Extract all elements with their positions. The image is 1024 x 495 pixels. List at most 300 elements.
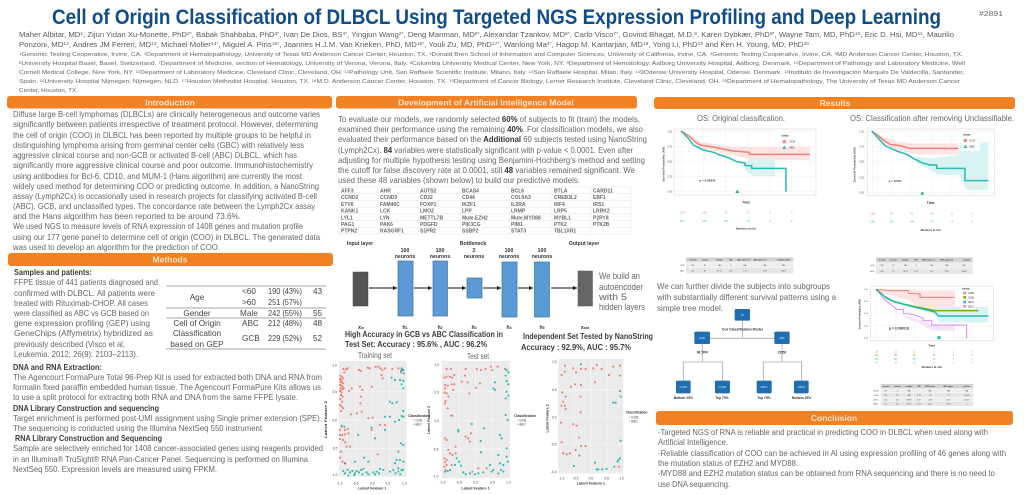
survival chart: after removing unclassifiable: Survival Probability (KM) bbox=[853, 147, 857, 182]
survival chart: after removing unclassifiable: 91 bbox=[890, 211, 894, 215]
chart title: original classification: OS: Original classification. bbox=[697, 114, 785, 123]
hazard table: original classification: 95% lower CI bbox=[737, 258, 750, 261]
gene table: ETV6 bbox=[341, 202, 354, 208]
abstract number: #2891 bbox=[979, 9, 1003, 18]
survival chart: four subgroups: 1.00 bbox=[864, 289, 869, 291]
autoencoder network diagram: neurons bbox=[464, 254, 484, 260]
scatter plot: test set: 0.5 bbox=[490, 481, 495, 485]
survival chart: after removing unclassifiable: GCB bbox=[969, 139, 975, 143]
hazard table: four subgroups: 42 bbox=[885, 404, 887, 406]
patient characteristics table: 55 bbox=[313, 309, 323, 318]
survival chart: after removing unclassifiable: 17 bbox=[930, 220, 934, 224]
hazard table: four subgroups: 95% lower bbox=[925, 385, 935, 388]
conclusion text: the mutation status of EZH2 and MYD88. bbox=[658, 459, 798, 468]
scatter plot: training set: 1.0 bbox=[402, 481, 407, 485]
survival chart: original classification: 1.00 bbox=[667, 132, 673, 134]
scatter plot: test set: Latent Feature 2 bbox=[427, 406, 431, 434]
classification tree diagram: Our Classification Model bbox=[722, 327, 763, 331]
classification tree diagram: ABC1 bbox=[760, 385, 768, 389]
survival chart: four subgroups: 0 bbox=[953, 362, 955, 364]
model description text: the cutoff for false discovery rate at 0.0001, still 48 variables remained significant. We bbox=[338, 166, 635, 175]
hazard table: four subgroups: 3.16 bbox=[917, 395, 922, 397]
classification tree diagram: Bottom 25% bbox=[792, 396, 811, 400]
autoencoder network diagram: h3 bbox=[471, 325, 477, 331]
autoencoder note bbox=[598, 270, 645, 312]
scatter plot: training set: 0.0 bbox=[370, 481, 375, 485]
survival chart: after removing unclassifiable: 135 bbox=[870, 220, 875, 224]
gene table: KANK1 bbox=[341, 209, 358, 215]
survival chart: four subgroups: 4 bbox=[953, 355, 955, 357]
scatter plot: test set: -0.5 bbox=[433, 447, 439, 451]
classification tree diagram: GCB bbox=[699, 336, 705, 340]
heading: development of AI model: Development of Artificial Intelligence Model bbox=[398, 98, 574, 108]
panel: development of AI model bbox=[323, 96, 653, 490]
survival chart: after removing unclassifiable: strata bbox=[963, 133, 971, 137]
hazard table: four subgroups: 28 bbox=[885, 391, 888, 393]
hazard table: four subgroups: NA bbox=[947, 390, 950, 393]
patient characteristics table: >60 bbox=[242, 298, 256, 307]
survival chart: after removing unclassifiable: 92 bbox=[890, 220, 894, 224]
hazard table: original classification: 79.11 bbox=[717, 271, 722, 273]
tree model description: with substantially different survival patterns using a bbox=[656, 293, 836, 302]
hazard table: four subgroups: 44.01 bbox=[907, 404, 911, 406]
autoencoder network diagram: 100 bbox=[436, 248, 444, 254]
gene table: BCAS4 bbox=[462, 188, 479, 194]
conclusion text: -Targeted NGS of RNA is reliable and practical in predicting COO in DLBCL when used along with bbox=[658, 428, 988, 437]
hazard table: after removing unclassifiable: events bbox=[890, 259, 897, 262]
samples and patients text: Leukemia. 2012; 26(9): 2103–2113). bbox=[14, 350, 138, 359]
hazard table: four subgroups: GCB2 bbox=[873, 395, 879, 397]
hazard table: original classification: 1 bbox=[730, 265, 731, 267]
survival chart: after removing unclassifiable: 1.00 bbox=[859, 132, 865, 134]
classification tree diagram: Top 75% bbox=[715, 396, 729, 400]
hazard table: after removing unclassifiable: 95% lower CI bbox=[922, 259, 935, 262]
heading: conclusion: Conclusion bbox=[811, 413, 857, 423]
affiliations: 1Genomic Testing Cooperative, Irvine, CA. 2Department of Hematopathology, University of Texas MD Anderson Cancer Center, Houston, TX. 3Donald Bren School of Information and Computer Sciences, University of California, Irvine, CA. 4Genomic Testing Cooperative, Irvine, CA. 5MD Anderson Cancer Center, Houston, TX. bbox=[19, 52, 963, 58]
introduction text: assay (Lymph2Cx) is occasionally used in research projects for classifying activated B-cell bbox=[13, 192, 317, 201]
title: Cell of Origin Classification of DLBCL Using Targeted NGS Expression Profiling and Deep Learning bbox=[52, 6, 941, 29]
hazard table: four subgroups: GCB1 bbox=[873, 391, 879, 393]
hazard table: original classification: NA bbox=[764, 264, 767, 267]
survival chart: four subgroups bbox=[858, 286, 993, 369]
patient characteristics table: ABC bbox=[242, 319, 259, 328]
survival chart: after removing unclassifiable: 4 bbox=[951, 220, 953, 224]
hazard table: original classification: events bbox=[702, 258, 709, 261]
DNA and RNA extraction and library text: DNA Library Construction and sequencing bbox=[13, 404, 159, 413]
survival chart: after removing unclassifiable: 18 bbox=[930, 211, 934, 215]
patient characteristics table: 43 bbox=[313, 287, 323, 296]
survival chart: four subgroups: 1 bbox=[933, 362, 935, 364]
hazard table: four subgroups: records bbox=[882, 385, 890, 388]
survival chart: four subgroups: 88 bbox=[894, 359, 898, 361]
scatter plot: test set: + ABC bbox=[516, 423, 526, 427]
survival chart: four subgroups: ABC2 bbox=[968, 305, 975, 308]
DNA and RNA extraction and library text: to use a split protocol for extracting both RNA and DNA from the same FFPE lysate. bbox=[13, 393, 298, 402]
survival chart: four subgroups: 56 bbox=[913, 359, 916, 361]
hazard table: four subgroups: 0 bbox=[966, 404, 968, 406]
survival chart: four subgroups: p = 0.000018 bbox=[889, 326, 909, 330]
autoencoder network diagram: 100 bbox=[401, 248, 409, 254]
scatter plot: training set: 0.5 bbox=[385, 481, 390, 485]
hazard table: original classification: ABC bbox=[680, 270, 685, 273]
hazard table: four subgroups: events bbox=[894, 385, 901, 388]
patient characteristics table: Classification bbox=[173, 329, 222, 338]
hazard table: after removing unclassifiable: 0.008 bbox=[962, 271, 967, 273]
hazard table: four subgroups: 1.3 bbox=[929, 395, 932, 397]
autoencoder network diagram: neurons bbox=[395, 254, 415, 260]
hazard table: after removing unclassifiable: 120 bbox=[880, 265, 885, 267]
gene table: IL2RA bbox=[511, 202, 526, 208]
gene table: CARD11 bbox=[593, 188, 613, 194]
survival chart: original classification: p = 0.00944 bbox=[699, 178, 716, 182]
samples and patients text: were classified as ABC vs GCB based on bbox=[13, 309, 149, 318]
survival chart: four subgroups: Numbers at risk bbox=[922, 365, 942, 369]
hazard table: after removing unclassifiable: p-Value bbox=[963, 260, 971, 262]
survival chart: four subgroups: 125 bbox=[875, 359, 879, 361]
autoencoder network diagram: h4 bbox=[506, 325, 512, 331]
gene table: PIK3CG bbox=[462, 222, 481, 228]
scatter plot: independent set: -1.0 bbox=[559, 476, 565, 480]
survival chart: four subgroups: Survival Probability (KM) bbox=[858, 299, 862, 329]
affiliations: Cornell Medical College, New York, NY. 11Department of Laboratory Medicine, Cleveland Clinic, Cleveland, OH. 12Pathology Unit, San Raffaele Scientific Institute, Milano, Italy. 13San Raffaele Hospital, Milan, Italy. 149Odense University Hospital, Odense, Denmark. 15Instituto de Investigación Marqués De Valdecilla, Santander, bbox=[19, 70, 964, 76]
scatter plot: training set: + ABC bbox=[412, 423, 422, 427]
autoencoder network diagram: neurons bbox=[430, 254, 450, 260]
survival chart: original classification: 71 bbox=[724, 211, 728, 215]
samples and patients text bbox=[13, 268, 158, 359]
introduction text: using antibodies for Bcl-6, CD10, and MUM-1 (Hans algorithm) are currently the most bbox=[13, 172, 303, 181]
model description text: used these 48 variables (shown below) to build our predictive models. bbox=[338, 176, 580, 185]
patient characteristics table: GCB bbox=[242, 334, 260, 343]
conclusion text: -Reliable classification of COO can be achieved in AI using expression profiling of 46 genes along with bbox=[658, 449, 1006, 458]
hazard table: after removing unclassifiable: NA bbox=[945, 264, 949, 267]
patient characteristics table: Gender bbox=[183, 309, 211, 318]
gene table: PTPN2 bbox=[341, 229, 357, 235]
scatter plot: training set: 1.0 bbox=[332, 363, 337, 367]
gene table: LRP5 bbox=[554, 209, 567, 215]
hazard table: original classification: p-Value (Z*P) bbox=[777, 259, 790, 261]
scatter plot: training set: Latent Feature 1 bbox=[358, 486, 386, 490]
survival chart: original classification: 121 bbox=[702, 219, 707, 223]
patient characteristics table: 190 (43%) bbox=[268, 287, 302, 296]
gene table: FAM46C bbox=[380, 202, 400, 208]
patient characteristics table: based on GEP bbox=[170, 340, 224, 349]
hazard table: original classification: 1.66 bbox=[729, 271, 733, 273]
gene table: P2RY8 bbox=[593, 215, 609, 221]
classification tree diagram: ABC bbox=[779, 336, 785, 340]
survival chart: four subgroups: 0 bbox=[971, 362, 973, 364]
hazard table: after removing unclassifiable: 51 bbox=[892, 265, 894, 267]
scatter plot: training set: + GCB bbox=[412, 419, 423, 423]
scatter plot: independent set: Latent Feature 1 bbox=[577, 482, 605, 486]
scatter plot: training set: -1.0 bbox=[332, 473, 338, 477]
samples and patients text: treated with Rituximab-CHOP. All cases bbox=[14, 299, 148, 308]
survival chart: after removing unclassifiable: 0.25 bbox=[859, 177, 865, 179]
accuracy heading: test set bbox=[345, 330, 503, 349]
gene table: STAT3 bbox=[511, 229, 526, 235]
heading: methods: Methods bbox=[153, 254, 188, 264]
scatter plot: independent set bbox=[545, 359, 647, 486]
affiliations bbox=[19, 52, 965, 94]
hazard table: original classification: 95% upper CI bbox=[754, 258, 767, 261]
hazard table: original classification bbox=[680, 257, 793, 273]
survival chart: original classification: 0.50 bbox=[667, 162, 673, 164]
authors: Maher Albitar, MD 1, Zijun Yidan Xu-Monette, PhD 2*, Babak Shahbaba, PhD 3*, Ivan De Dios, BS 4*, Yingjun Wang 2*, Deng Manman, MD 5*, Alexandar Tzankov, MD 6*, Carlo Visco 7*, Govind Bhagat, M.D. 8, Karen Dybkær, PhD 9*, Wayne Tam, MD, PhD 10, Eric D. Hsi, MD 11, Maurilio bbox=[19, 30, 954, 39]
survival chart: after removing unclassifiable: 0.75 bbox=[859, 147, 865, 149]
survival chart: four subgroups: 0 bbox=[971, 351, 973, 353]
model description text: To evaluate our models, we randomly selected 60% of subjects to fit (train) the models, bbox=[338, 115, 640, 124]
hazard table: four subgroups: 63 bbox=[896, 399, 899, 401]
gene table: LRRK2 bbox=[593, 209, 610, 215]
patient characteristics table: Age bbox=[190, 293, 205, 302]
hazard table: four subgroups: NA bbox=[908, 390, 911, 393]
gene table: AUTS2 bbox=[420, 188, 437, 194]
scatter plot: independent set: -0.5 bbox=[551, 443, 557, 447]
samples and patients text: previously described (Visco et al, bbox=[14, 340, 125, 349]
survival chart: after removing unclassifiable: 120 bbox=[870, 211, 875, 215]
gene table: PAG1 bbox=[341, 222, 354, 228]
patient characteristics table: 212 (48%) bbox=[268, 319, 302, 328]
introduction text: using our 177 gene panel to determine cell of origin (COO) in DLBCL. The generated data bbox=[13, 233, 320, 242]
heading: development of AI model bbox=[336, 96, 637, 108]
hazard table: after removing unclassifiable: NA bbox=[904, 264, 907, 267]
introduction text: distinguishing lymphoma arising from germinal center cells (GBC) with relatively less bbox=[13, 141, 304, 150]
introduction text: significantly more aggressive clinical course and poor outcome. Immunohistochemistry bbox=[13, 161, 314, 170]
survival chart: original classification: Time bbox=[742, 200, 750, 204]
heading: results bbox=[654, 97, 1015, 109]
conclusion text: Artificial Intelligence. bbox=[658, 438, 728, 447]
autoencoder network diagram: 2 bbox=[473, 248, 476, 254]
survival chart: original classification: 69 bbox=[724, 219, 728, 223]
hazard table: original classification: median bbox=[716, 259, 724, 261]
hazard table: original classification: NA bbox=[718, 264, 721, 267]
gene table bbox=[339, 187, 631, 235]
hazard table: original classification: 61 bbox=[704, 265, 706, 267]
gene table: AFF3 bbox=[341, 188, 354, 194]
survival chart: after removing unclassifiable: 1 bbox=[971, 220, 973, 224]
scatter plot: test set: 0.5 bbox=[434, 391, 439, 395]
gene table: TBL1XR1 bbox=[554, 229, 576, 235]
survival chart: four subgroups: strata bbox=[962, 286, 970, 290]
hazard table: four subgroups: NA bbox=[929, 390, 932, 393]
gene table: LCK bbox=[380, 209, 391, 215]
scatter plot: training set: -0.5 bbox=[332, 447, 338, 451]
DNA and RNA extraction and library text: Sample are selectively enriched for 1408 cancer-associated genes using reagents provided bbox=[13, 444, 323, 453]
survival chart: after removing unclassifiable: 48 bbox=[910, 220, 914, 224]
conclusion text bbox=[658, 428, 1006, 489]
scatter plot: test set: 0.0 bbox=[473, 481, 478, 485]
hazard table: original classification: 1.19 bbox=[743, 271, 748, 273]
DNA and RNA extraction and library text: The Agencourt FormaPure Total 96-Prep Kit is used for extracted both DNA and RNA from bbox=[13, 373, 322, 382]
survival chart: after removing unclassifiable: 0.50 bbox=[859, 162, 865, 164]
survival chart: after removing unclassifiable: Numbers at risk bbox=[921, 228, 941, 232]
scatter plot: independent set: + GCB bbox=[628, 415, 639, 419]
survival chart: four subgroups: 5 bbox=[933, 351, 935, 353]
survival chart: original classification bbox=[662, 129, 816, 231]
introduction text: (ABC), GCB, and unclassified types. The concordance rate between the Lymph2Cx assay bbox=[13, 202, 316, 211]
hazard table: four subgroups: 88.86 bbox=[907, 399, 912, 401]
model description text: (Lymph2Cx). 84 variables were statistically significant with p-value < 0.0001. Even after bbox=[338, 146, 633, 155]
conclusion text: -MYD88 and EZH2 mutation status can be obtained from RNA sequencing and there is no need to bbox=[658, 469, 995, 478]
autoencoder network diagram: neurons bbox=[499, 254, 519, 260]
introduction text bbox=[12, 110, 320, 252]
tree model description bbox=[656, 282, 836, 313]
hazard table: after removing unclassifiable: 2.61 bbox=[945, 271, 949, 273]
hazard table: after removing unclassifiable: median bbox=[902, 260, 910, 262]
hazard table: four subgroups: 16.66 bbox=[946, 404, 952, 406]
survival chart: original classification: 2 bbox=[791, 211, 793, 215]
survival chart: four subgroups: 33 bbox=[894, 362, 898, 364]
hazard table: four subgroups: 115 bbox=[884, 395, 888, 397]
scatter plot: test set: + GCB bbox=[516, 419, 527, 423]
training set label: Training set bbox=[358, 351, 393, 360]
panel: methods bbox=[8, 253, 333, 474]
patient characteristics table: 52 bbox=[313, 334, 323, 343]
autoencoder note: with 5 bbox=[598, 291, 627, 302]
tree model description: simple tree model. bbox=[657, 304, 723, 313]
scatter plot: independent set: 0.5 bbox=[604, 476, 609, 480]
autoencoder network diagram: h2 bbox=[437, 325, 443, 331]
survival chart: four subgroups: ABC1 bbox=[968, 301, 975, 304]
hazard table: after removing unclassifiable: 70 bbox=[892, 271, 895, 273]
scatter plot: training set: 0.5 bbox=[332, 390, 337, 394]
scatter plot: independent set: 1.0 bbox=[619, 476, 624, 480]
scatter plot: test set: -1.0 bbox=[433, 475, 439, 479]
scatter plot: training set: -0.5 bbox=[353, 481, 359, 485]
hazard table: four subgroups: 0.008 bbox=[964, 395, 970, 397]
hazard table: four subgroups: NA bbox=[908, 394, 911, 397]
scatter plot: independent set: Latent Feature 2 bbox=[545, 404, 549, 432]
gene table: LYL1 bbox=[341, 215, 353, 221]
classification tree diagram bbox=[674, 309, 811, 400]
survival chart: after removing unclassifiable: p = 0.007 bbox=[889, 179, 902, 183]
patient characteristics table: Cell of Origin bbox=[173, 319, 221, 328]
hazard table: original classification: 0.003 bbox=[781, 271, 787, 273]
survival chart: original classification: ABC bbox=[789, 146, 795, 150]
gene table: CD44 bbox=[462, 195, 475, 201]
survival chart: original classification: 143 bbox=[680, 211, 685, 215]
hazard table: four subgroups: 95% upper bbox=[943, 385, 954, 388]
hazard table: four subgroups: 8.18 bbox=[946, 399, 951, 401]
heading: methods bbox=[8, 253, 333, 266]
introduction text: Diffuse large B-cell lymphomas (DLBCLs) are clinically heterogeneous and outcome varies bbox=[13, 110, 320, 119]
hazard table: after removing unclassifiable: 1 bbox=[915, 265, 917, 267]
scatter plot: test set: Classification bbox=[514, 414, 536, 418]
survival chart: four subgroups: 4 bbox=[953, 359, 955, 361]
conclusion text: use DNA sequencing. bbox=[658, 480, 730, 489]
hazard table: after removing unclassifiable: 135 bbox=[880, 271, 885, 273]
survival chart: four subgroups: Time bbox=[928, 344, 935, 348]
tree model description: We can further divide the subjects into subgroups bbox=[657, 282, 830, 291]
autoencoder network diagram bbox=[347, 241, 599, 331]
authors: Ponzoni, MD 12, Andres JM Ferreri, MD 13, Michael Moller 14*, Miguel A. Piris 15*, Joannes H.J.M. Van Krieken, PhD, MD 16*, Youli Zu, MD, PhD 17*, Wanlong Ma 4*, Hagop M. Kantarjian, MD 18, Yong Li, PhD 19 and Ken H. Young, MD, PhD 20 bbox=[19, 40, 809, 49]
hazard table: after removing unclassifiable: 1.17 bbox=[930, 271, 934, 273]
survival chart: original classification: GCB bbox=[789, 140, 795, 144]
chart title: after removing unclassifiable: OS: Classification after removing Unclassifiable. bbox=[850, 114, 1014, 123]
survival chart: four subgroups: 1 bbox=[971, 359, 973, 361]
heading: introduction bbox=[7, 96, 332, 108]
autoencoder network diagram: h5 bbox=[539, 325, 545, 331]
accuracy heading: independent set: Independent Set Tested by NanoString bbox=[523, 332, 653, 341]
introduction text: aggressive clinical course and non-GCB or activated B-cell (ABC) DLBCL, which has bbox=[13, 151, 297, 160]
affiliations: 6University Hospital Basel, Basel, Switzerland. 7Department of Medicine, section of Hematology, University of Verona, Verona, Italy. 8Columbia University Medical Center, New York, NY. 9Department of Hematology, Aalborg University Hospital, Aalborg, Denmark. 10Department of Pathology and Laboratory Medicine, Well bbox=[19, 61, 965, 67]
scatter plot: training set bbox=[332, 361, 430, 490]
gene table: Mute.EZH2 bbox=[462, 215, 488, 221]
patient characteristics table: 48 bbox=[313, 319, 323, 328]
survival chart: original classification: 0.00 bbox=[667, 192, 673, 194]
hazard table: four subgroups: ABC1 bbox=[873, 398, 879, 401]
gene table: AHR bbox=[380, 188, 391, 194]
heading: results: Results bbox=[820, 98, 851, 108]
DNA and RNA extraction and library text: NextSeq 550. Expression levels are measured using FPKM. bbox=[13, 465, 217, 474]
gene table: FOXP1 bbox=[420, 202, 437, 208]
autoencoder network diagram: h1 bbox=[402, 325, 408, 331]
gene table: PIM1 bbox=[511, 222, 523, 228]
introduction text: We used NGS to measure levels of RNA expression of 1408 genes and mutation profile bbox=[13, 222, 303, 231]
samples and patients text: GeneChips (Affymetrix) hybridized as bbox=[14, 329, 153, 338]
scatter plot: test set: 1.0 bbox=[434, 363, 439, 367]
survival chart: four subgroups: 0.00 bbox=[864, 337, 869, 339]
survival chart: four subgroups: 0.75 bbox=[864, 301, 869, 303]
scatter plot: independent set: 0.0 bbox=[552, 415, 557, 419]
gene table: CREB3L2 bbox=[554, 195, 577, 201]
accuracy heading: test set: Test Set: Accuracy : 95.6% , AUC : 96.2% bbox=[345, 340, 488, 349]
gene table: CCND2 bbox=[341, 195, 358, 201]
heading: introduction: Introduction bbox=[145, 98, 195, 108]
survival chart: original classification: 5 bbox=[769, 211, 771, 215]
survival chart: after removing unclassifiable: ABC bbox=[969, 145, 975, 149]
scatter plot: independent set: + ABC bbox=[628, 420, 638, 424]
DNA and RNA extraction and library text: Target enrichment is performed post-UMI assignment using Single primer extension (SPE). bbox=[13, 414, 322, 423]
heading: conclusion bbox=[656, 411, 1013, 425]
survival chart: after removing unclassifiable: 51 bbox=[910, 211, 914, 215]
hazard table: four subgroups: 55 bbox=[896, 395, 899, 397]
gene table: IRF4 bbox=[554, 202, 565, 208]
gene table: Mute.MYD88 bbox=[511, 215, 541, 221]
hazard table: four subgroups: 7.01 bbox=[917, 404, 921, 406]
survival chart: after removing unclassifiable: 0.00 bbox=[859, 193, 865, 195]
classification tree diagram: ABC2 bbox=[798, 385, 805, 389]
hazard table: after removing unclassifiable: ABC bbox=[870, 270, 875, 273]
DNA and RNA extraction and library text: RNA Library Construction and Sequencing bbox=[15, 434, 162, 443]
DNA and RNA extraction and library text: The sequencing is conducted using the Illumina NextSeq 550 instrument bbox=[13, 424, 263, 433]
hazard table: four subgroups: HR bbox=[918, 386, 921, 388]
gene table: LYN bbox=[380, 215, 390, 221]
scatter plot: independent set: Classification bbox=[626, 411, 647, 415]
gene table: COL9A3 bbox=[511, 195, 531, 201]
survival chart: original classification: Survival Probability (KM) bbox=[662, 147, 666, 182]
hazard table: four subgroups: NA bbox=[965, 390, 969, 393]
hazard table: four subgroups: median bbox=[906, 386, 913, 388]
patient characteristics table: 229 (52%) bbox=[268, 334, 302, 343]
patient characteristics table: Male bbox=[240, 309, 258, 318]
scatter plot: test set: -0.5 bbox=[456, 481, 462, 485]
survival chart: four subgroups: 22 bbox=[894, 351, 898, 353]
introduction text: and the Hans algorithm has been reported to be around 73.6%. bbox=[13, 212, 241, 221]
samples and patients text: FFPE tissue of 441 patients diagnosed and bbox=[14, 278, 158, 287]
hazard table: original classification: 167 bbox=[691, 271, 694, 273]
hazard table: original classification: records bbox=[689, 258, 697, 261]
survival chart: four subgroups: 0.25 bbox=[864, 325, 869, 327]
survival chart: original classification: Numbers at risk bbox=[736, 227, 757, 231]
hazard table: four subgroups: 3.37 bbox=[917, 399, 921, 401]
gene table: MYBL1 bbox=[554, 215, 571, 221]
model description text: evaluated their performance based on the Additional 60 subjects tested using NanoString bbox=[338, 135, 647, 144]
accuracy heading: independent set: Accuracy : 92.9%, AUC : 95.7% bbox=[521, 343, 632, 352]
hazard table: after removing unclassifiable: GCB bbox=[870, 265, 875, 267]
model description text: adjusting for multiple hypothesis testing using Benjamini-Hochberg’s method and setting bbox=[338, 156, 645, 165]
hazard table: four subgroups: 26 bbox=[896, 404, 899, 406]
classification tree diagram: CD58 bbox=[778, 351, 786, 355]
